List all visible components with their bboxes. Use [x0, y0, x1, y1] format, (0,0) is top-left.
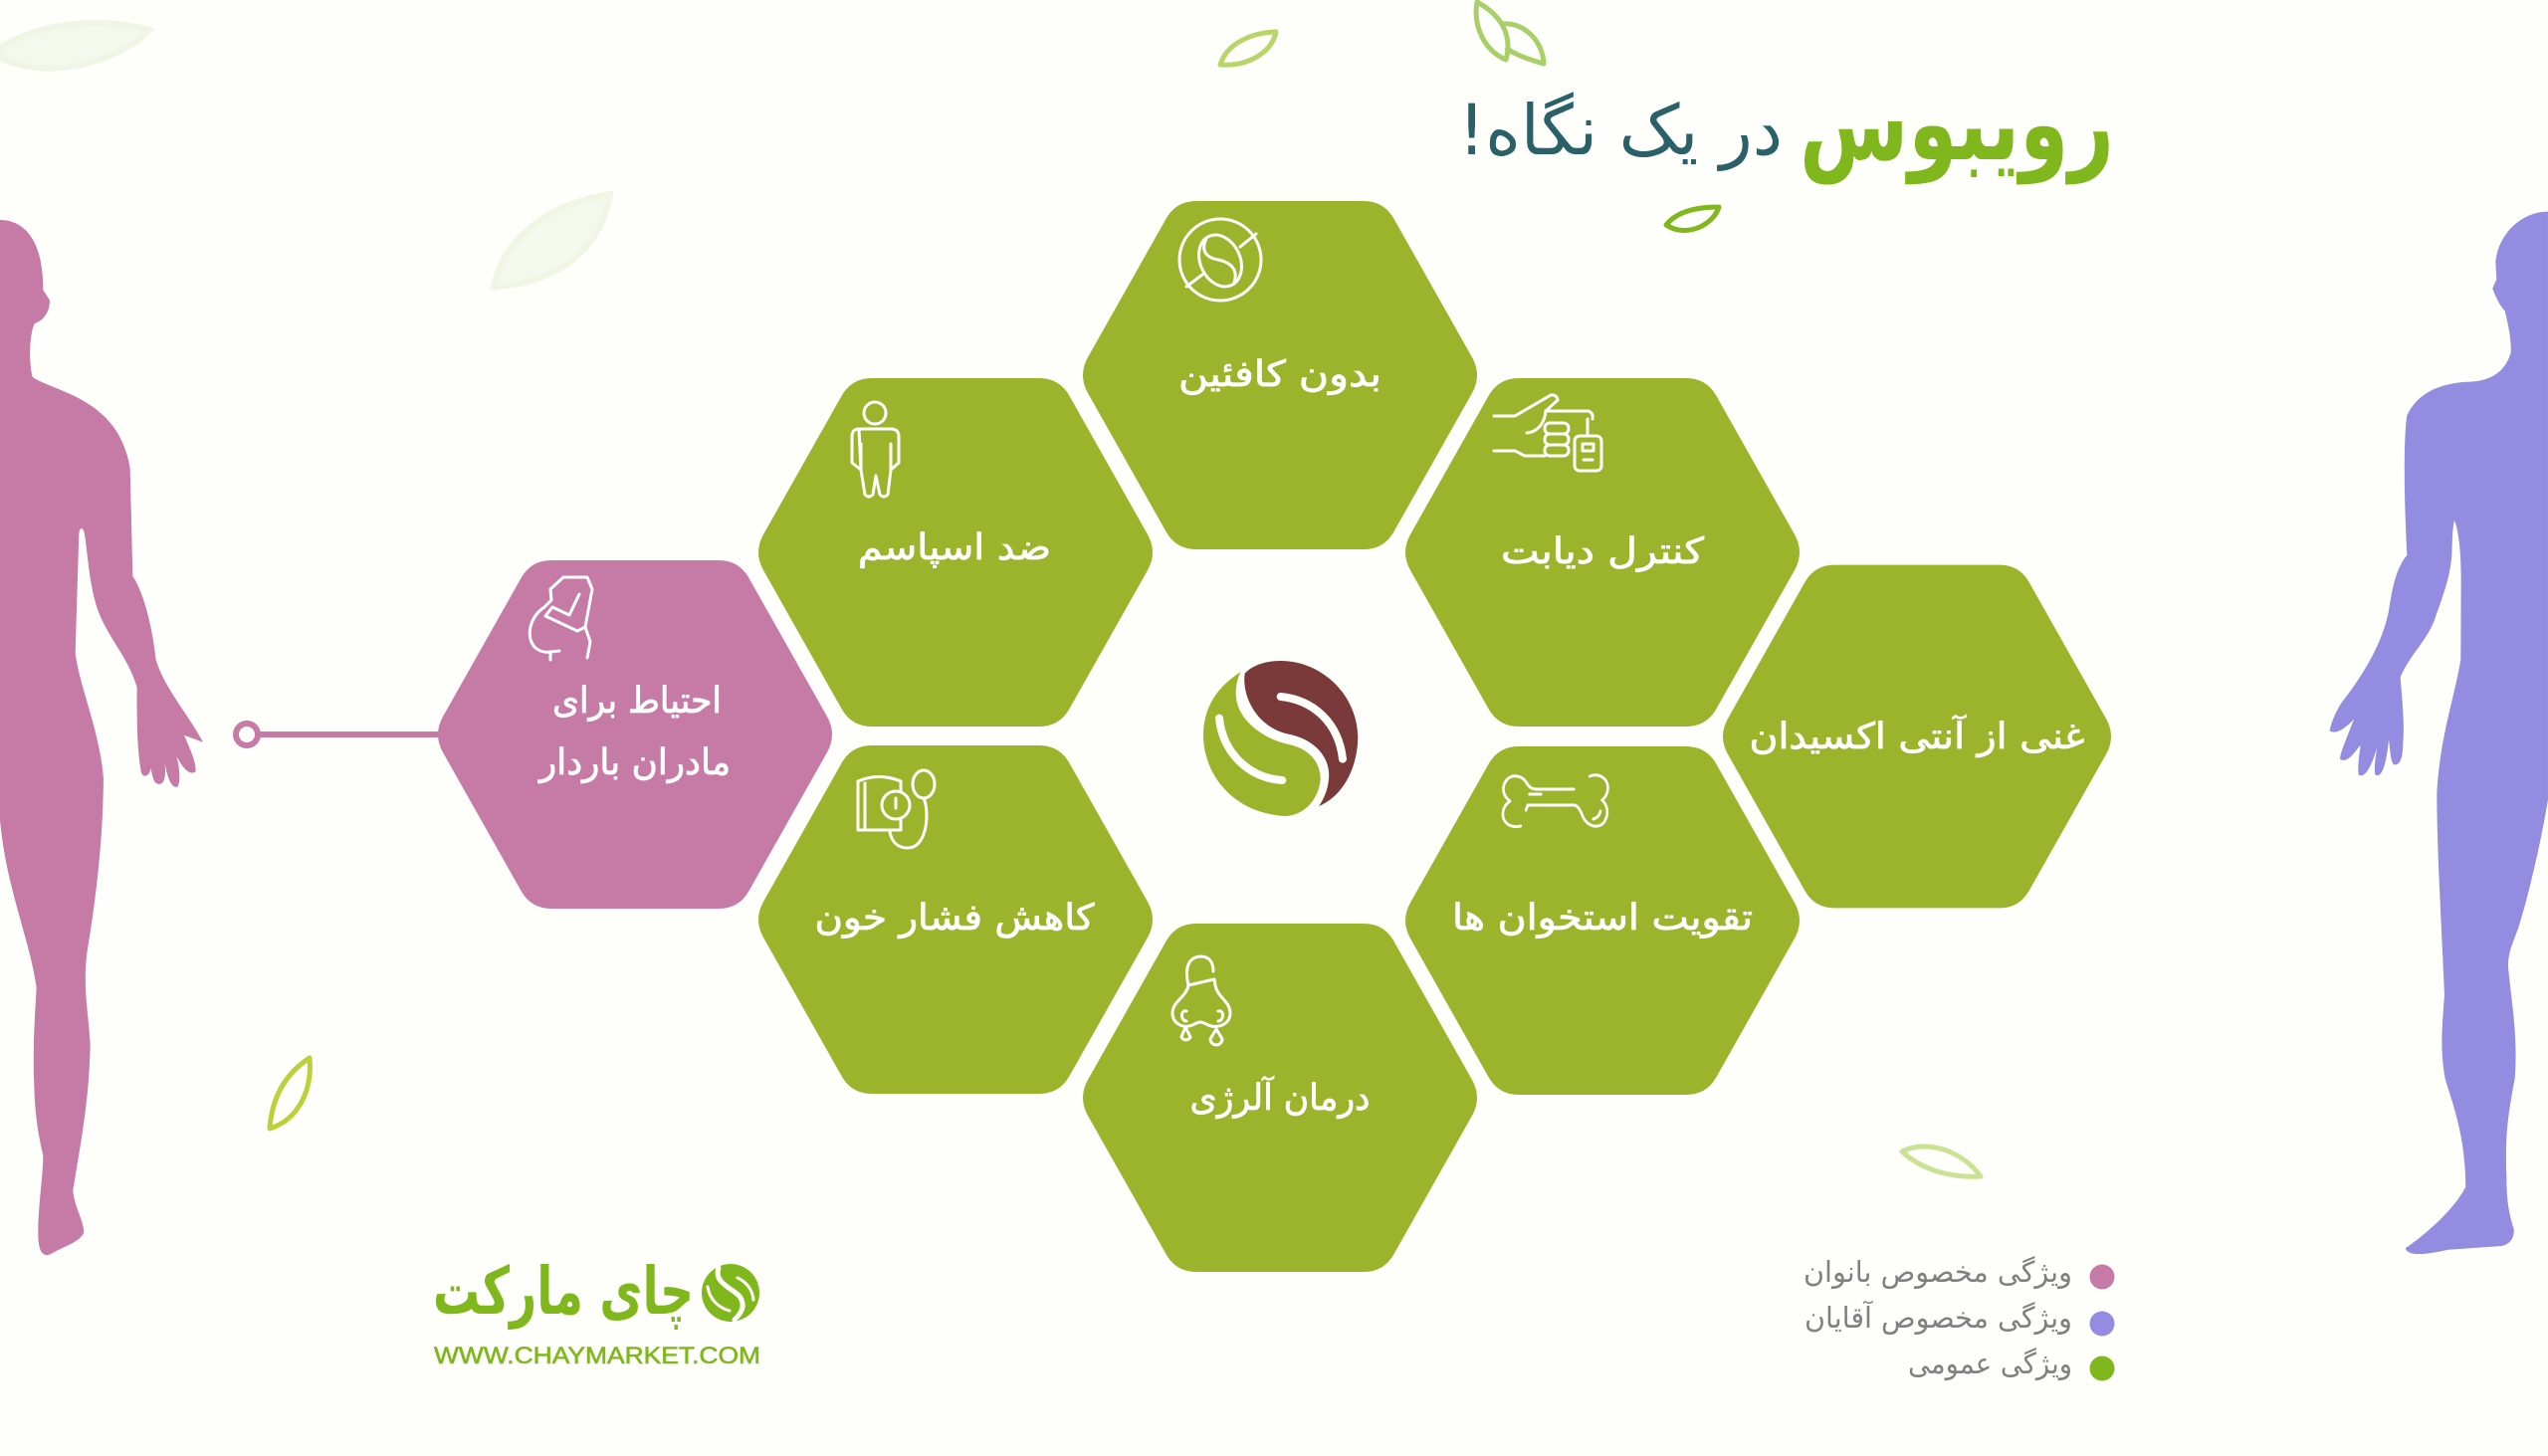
leaf: lower left	[270, 1058, 310, 1129]
brand logo	[433, 1253, 760, 1369]
title: رویبوس	[1800, 63, 2114, 185]
title	[1458, 63, 2114, 185]
label: بدون کافئین	[1178, 354, 1381, 395]
connector: pink line from figure to hexagon	[236, 724, 443, 745]
legend: women: ویژگی مخصوص بانوان	[1804, 1255, 2072, 1289]
hexagon	[1083, 201, 1477, 549]
hexagon	[1083, 924, 1477, 1272]
panel: no caffeine	[1083, 201, 1477, 549]
legend	[1804, 1255, 2114, 1381]
icon: bone	[1503, 775, 1607, 827]
hexagon	[758, 745, 1153, 1094]
label: درمان آلرژی	[1190, 1075, 1370, 1119]
label: تقویت استخوان ها	[1452, 898, 1753, 938]
figure: woman silhouette	[0, 220, 203, 1255]
logo emblem	[702, 1264, 759, 1322]
icon: blood pressure cuff	[858, 770, 935, 848]
logo wordmark: چای مارکت	[433, 1253, 694, 1330]
website: WWW.CHAYMARKET.COM	[434, 1343, 760, 1369]
hexagon	[758, 378, 1153, 727]
title: در یک نگاه!	[1458, 90, 1783, 171]
legend: men: ویژگی مخصوص آقایان	[1805, 1300, 2072, 1335]
label: کنترل دیابت	[1501, 531, 1705, 572]
hexagon	[1405, 746, 1800, 1095]
icon: crossed coffee bean	[1179, 219, 1261, 301]
label: ضد اسپاسم	[858, 527, 1051, 568]
leaf: top small	[1220, 32, 1276, 65]
hexagon	[438, 560, 832, 909]
icon: runny nose	[1172, 956, 1230, 1045]
panel: diabetes control	[1405, 378, 1800, 727]
hexagon	[1405, 378, 1800, 727]
icon: hand with glucose meter	[1494, 395, 1601, 471]
figure: man silhouette	[2330, 212, 2548, 1254]
label line two: مادران باردار	[537, 742, 731, 783]
label: احتیاط برای	[552, 681, 722, 722]
panel: rich in antioxidants	[1723, 565, 2111, 908]
leaf: under title	[1666, 207, 1719, 231]
leaf: lower right	[1902, 1146, 1981, 1176]
center logo	[1203, 661, 1358, 816]
panel: bone strengthening	[1405, 746, 1800, 1095]
icon: pregnant woman	[530, 577, 592, 660]
hexagon	[1723, 565, 2111, 908]
icon: person	[852, 402, 899, 497]
leaves: top double	[1476, 2, 1544, 64]
leaf: faint top left	[0, 23, 149, 69]
panel: allergy treatment	[1083, 924, 1477, 1272]
panel: anti-spasm	[758, 378, 1153, 727]
leaf: faint upper middle	[494, 194, 610, 287]
label: کاهش فشار خون	[814, 898, 1095, 938]
panel: lowers blood pressure	[758, 745, 1153, 1094]
label: غنی از آنتی اکسیدان	[1750, 714, 2084, 757]
panel: caution for pregnant women	[438, 560, 832, 909]
legend: general: ویژگی عمومی	[1908, 1347, 2072, 1380]
